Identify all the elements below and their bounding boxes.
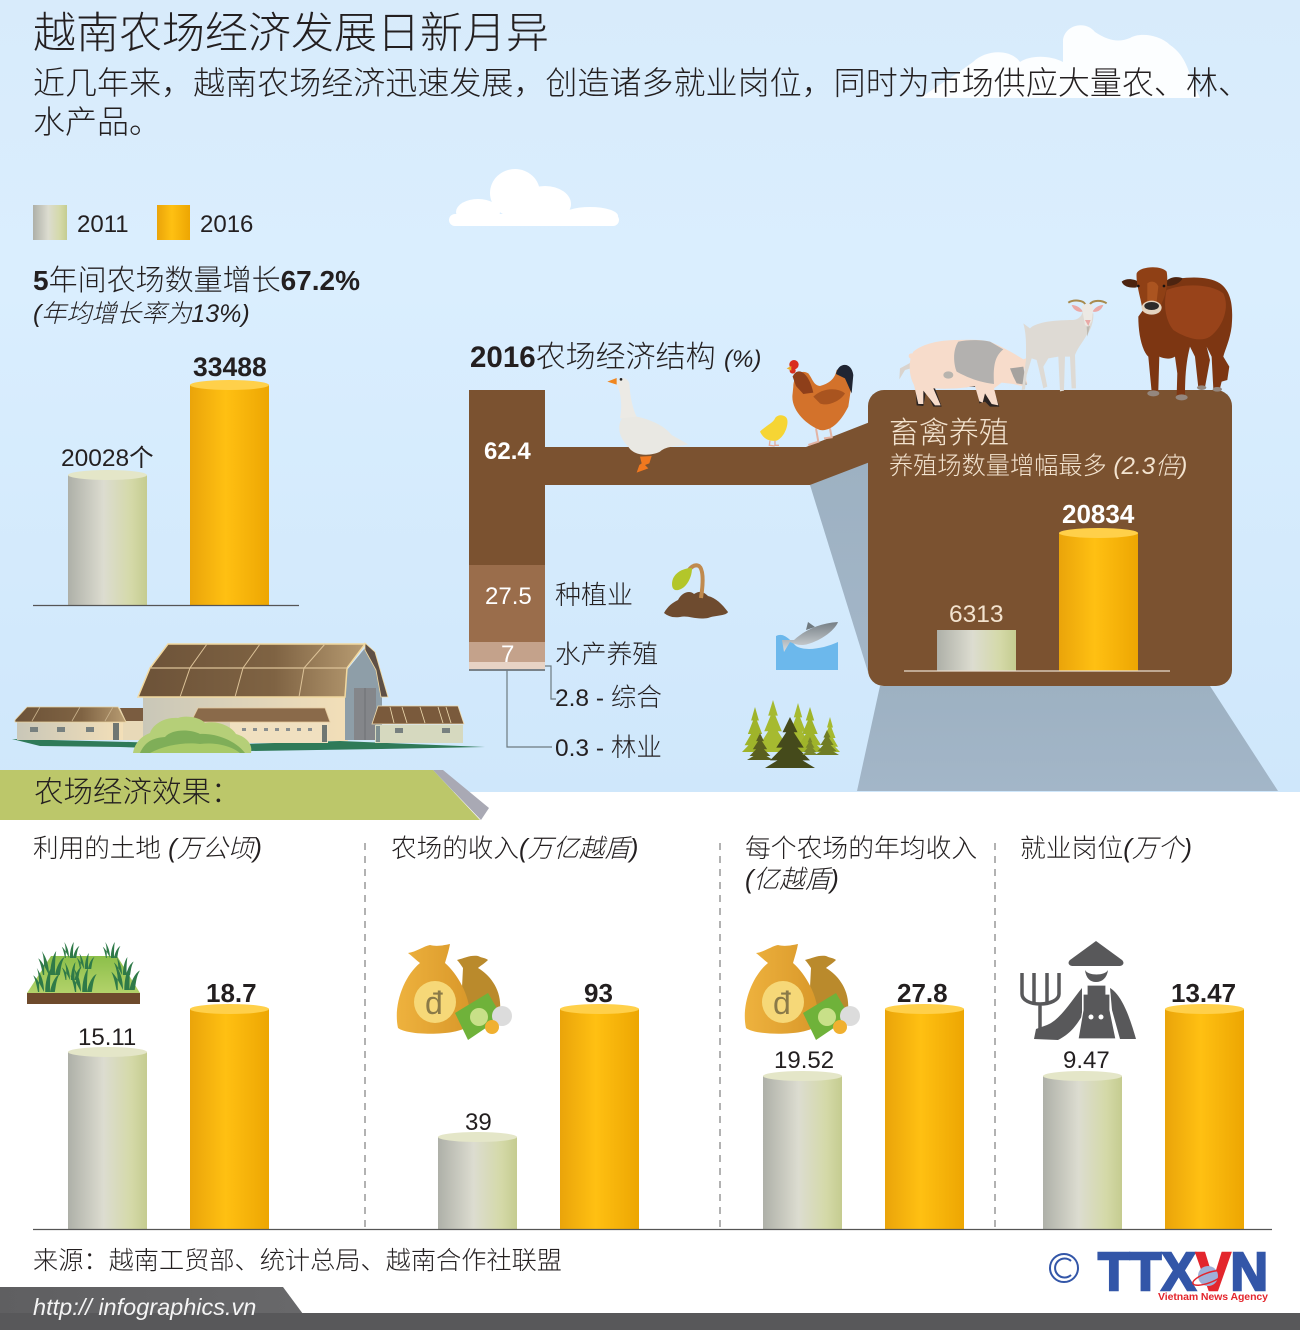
icon: grass field — [27, 942, 140, 1004]
bar chart: number of farms: 33488 — [193, 352, 267, 382]
icon: goose — [607, 378, 688, 473]
icon: money bags: đ — [773, 985, 791, 1021]
structure labels with leader lines: 种植业 — [555, 580, 633, 610]
section banner: farm economic results — [0, 770, 1300, 1330]
logo: TTXVN: TTXVN — [1098, 1242, 1268, 1302]
icon: fish and water — [776, 622, 838, 670]
livestock platform panel: 畜禽养殖 — [889, 417, 1009, 450]
panel: jobs: 就业岗位(万个) — [1020, 834, 1192, 863]
panel: average income per farm: 19.52 — [774, 1047, 834, 1074]
subtitle text — [33, 65, 1250, 140]
icon: money bags — [745, 944, 860, 1040]
panel: average income per farm: (亿越盾) — [745, 866, 839, 894]
cloud: top right — [920, 25, 1200, 98]
website strip — [0, 1287, 1300, 1330]
legend — [33, 205, 253, 240]
subtitle text: 水产品。 — [33, 104, 161, 140]
panel: jobs: 13.47 — [1171, 978, 1236, 1008]
panel: farm income: 39 — [465, 1109, 492, 1136]
structure labels with leader lines: 水产养殖 — [555, 640, 658, 669]
panel: land: 利用的土地 (万公顷) — [33, 834, 262, 863]
icon: sprout — [664, 565, 728, 618]
panel: jobs: 9.47 — [1063, 1047, 1110, 1074]
panel: land: 18.7 — [206, 978, 257, 1008]
panel: land — [27, 834, 269, 1229]
panel: average income per farm — [745, 834, 977, 1229]
icon: chick — [760, 415, 787, 446]
icon: farmer with pitchfork — [1022, 941, 1136, 1040]
stacked column: farm structure — [469, 390, 545, 670]
panel: farm income: 93 — [584, 978, 613, 1008]
panel: farm income — [391, 834, 639, 1229]
cloud: middle — [449, 169, 619, 226]
panel: farm income: 农场的收入(万亿越盾) — [391, 834, 638, 863]
livestock platform panel: 6313 — [949, 601, 1004, 628]
section banner: farm economic results: 农场经济效果： — [34, 776, 241, 809]
stacked column: farm structure: 27.5 — [485, 583, 532, 610]
panel: land: 15.11 — [78, 1024, 136, 1051]
stacked column: farm structure: 62.4 — [484, 438, 531, 465]
icon: hen — [787, 360, 853, 445]
livestock platform panel: 20834 — [1062, 499, 1135, 529]
subtitle text: 近几年来，越南农场经济迅速发展，创造诸多就业岗位，同时为市场供应大量农、林、 — [33, 65, 1250, 101]
shadow under platform — [810, 462, 1278, 791]
legend: 2011 — [77, 211, 129, 238]
title: 越南农场经济发展日新月异 — [33, 10, 549, 58]
heading: farm count growth: (年均增长率为13%) — [33, 300, 250, 328]
heading: farm count growth — [33, 264, 360, 328]
bar chart: number of farms — [33, 352, 299, 606]
livestock platform panel — [545, 390, 1232, 686]
structure labels with leader lines — [507, 580, 662, 762]
background sky — [0, 0, 1300, 792]
structure labels with leader lines: 0.3 - 林业 — [555, 734, 662, 762]
illustration: farm buildings — [12, 643, 485, 753]
bar chart: number of farms: 20028个 — [61, 445, 154, 472]
icon: goat — [1022, 301, 1107, 391]
icon: pig — [899, 340, 1028, 407]
panel: jobs — [1020, 834, 1244, 1229]
heading: 2016 structure: 2016农场经济结构 (%) — [470, 341, 761, 374]
icon: money bags — [397, 944, 512, 1040]
source note: 来源：越南工贸部、统计总局、越南合作社联盟 — [33, 1247, 562, 1275]
logo: TTXVN: Vietnam News Agency — [1158, 1291, 1268, 1303]
heading: farm count growth: 5年间农场数量增长67.2% — [33, 264, 360, 297]
legend: 2016 — [200, 211, 253, 238]
icon: cow — [1122, 267, 1232, 400]
panel: average income per farm: 27.8 — [897, 978, 948, 1008]
livestock platform panel: 养殖场数量增幅最多 (2.3倍) — [889, 453, 1187, 480]
icon: pine trees — [742, 700, 840, 768]
website strip: http:// infographics.vn — [33, 1294, 256, 1320]
panel: average income per farm: 每个农场的年均收入 — [745, 834, 977, 863]
icon: money bags: đ — [425, 985, 443, 1021]
structure labels with leader lines: 2.8 - 综合 — [555, 684, 662, 712]
stacked column: farm structure: 7 — [501, 641, 514, 668]
